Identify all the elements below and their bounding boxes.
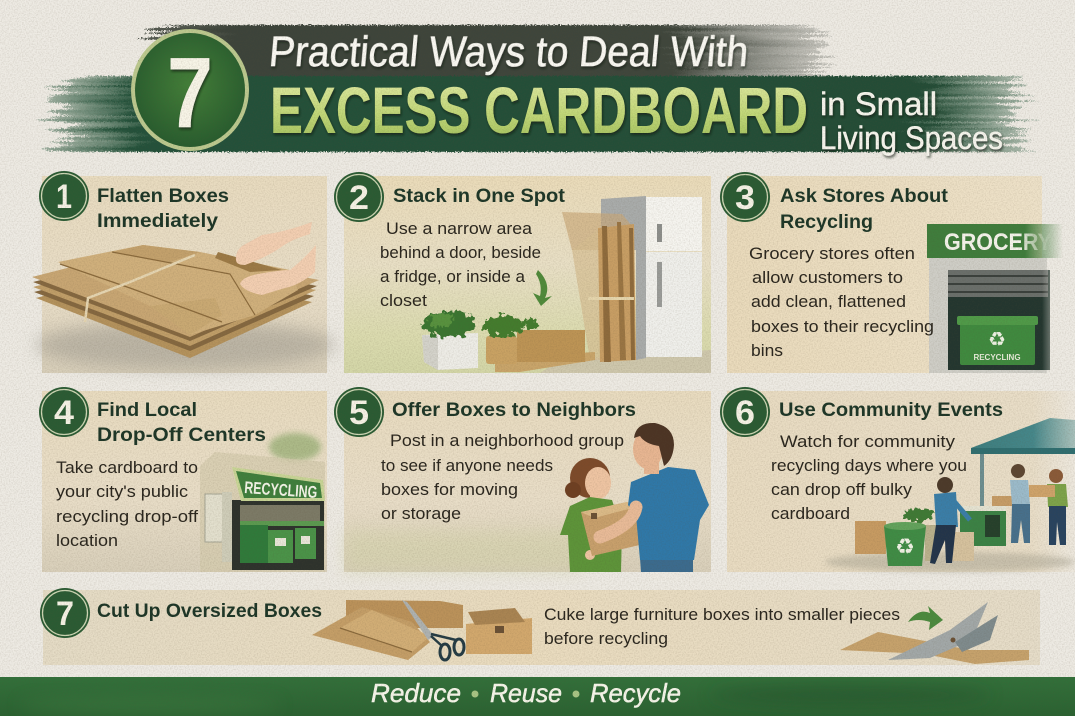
panel 3: ask stores (720, 172, 1066, 373)
illustration: recycling bucket (884, 522, 926, 566)
body 3: bins (751, 341, 783, 360)
body 5 (381, 431, 624, 523)
illustration: grocery store front: GROCERY (944, 229, 1052, 256)
brush stroke: lower green (65, 76, 1015, 152)
badge 4: 4 (54, 394, 74, 432)
heading 1: Flatten Boxes (97, 186, 229, 207)
icon: green arrow (533, 270, 552, 306)
body 2: Use a narrow area (386, 219, 533, 238)
body 4: location (56, 531, 118, 550)
title badge (131, 29, 249, 151)
body 7: Cuke large furniture boxes into smaller pieces (544, 605, 900, 624)
footer band: Recycle (590, 678, 681, 708)
body 2: a fridge, or inside a (380, 267, 526, 286)
footer band: Reuse (490, 678, 562, 708)
illustration: foliage (904, 508, 932, 522)
illustration: scissors (402, 600, 464, 660)
panel 4: drop-off centers (39, 387, 327, 572)
illustration: leaning cardboard (562, 212, 636, 362)
illustration: cut cardboard pieces (312, 600, 463, 660)
illustration: floor (540, 350, 711, 373)
badge 6: 6 (735, 394, 755, 432)
title line 2: EXCESS CARDBOARD (270, 73, 808, 147)
body 6: cardboard (771, 504, 850, 523)
badge 7: 7 (56, 595, 74, 633)
body 2: behind a door, beside (380, 243, 541, 262)
body 4: recycling drop-off (56, 507, 198, 526)
body 3 (749, 244, 934, 360)
illustration: drop-off building (200, 452, 325, 572)
body 5: or storage (381, 504, 461, 523)
illustration: tree (269, 433, 321, 461)
heading 3: Ask Stores About (780, 186, 949, 207)
badge 2: 2 (349, 179, 369, 217)
illustration: recycling bin: RECYCLING (973, 353, 1021, 362)
body 4: your city's public (56, 482, 189, 501)
heading 4 (97, 400, 266, 446)
body 4: Take cardboard to (56, 458, 198, 477)
floor shadow (35, 321, 335, 369)
title line 3: in Small (820, 86, 937, 122)
title line 4: Living Spaces (820, 120, 1003, 156)
body 3: add clean, flattened (751, 292, 906, 311)
panel 7: cut up oversized boxes (40, 588, 1040, 665)
heading 7: Cut Up Oversized Boxes (97, 601, 322, 622)
badge 6 (720, 387, 770, 437)
illustration: recycling sign: RECYCLING (244, 478, 318, 502)
heading 3 (780, 186, 949, 233)
body 3: Grocery stores often (749, 244, 915, 263)
badge 1 (39, 171, 89, 221)
panel 2: stack in one spot (334, 172, 711, 373)
body 5: to see if anyone needs (381, 456, 553, 475)
body 7 (544, 605, 900, 648)
footer band (0, 677, 1075, 716)
body 6: Watch for community (780, 432, 956, 451)
illustration: grocery store front (927, 224, 1066, 373)
heading 3: Recycling (780, 212, 873, 233)
illustration: cardboard box (581, 502, 640, 556)
body 3: allow customers to (752, 268, 903, 287)
badge 3 (720, 172, 770, 222)
illustration: recycling bin: ♻ (988, 327, 1006, 351)
badge 1: 1 (56, 178, 72, 216)
illustration: stack of flattened cardboard (32, 245, 319, 358)
illustration: man in blue shirt (600, 423, 709, 572)
panel 1: flatten boxes (32, 171, 335, 373)
heading 5: Offer Boxes to Neighbors (392, 400, 636, 421)
title line 1: Practical Ways to Deal With (267, 28, 750, 75)
body 2: closet (380, 291, 427, 310)
heading 1: Immediately (97, 211, 218, 232)
brush stroke: upper dark (160, 25, 820, 79)
body 5: Post in a neighborhood group (390, 431, 624, 450)
badge 4 (39, 387, 89, 437)
illustration: plants (422, 311, 538, 337)
body 7: before recycling (544, 629, 668, 648)
badge 3: 3 (735, 179, 755, 217)
heading 6: Use Community Events (779, 400, 1003, 421)
title banner (65, 25, 1015, 156)
illustration: tent (971, 418, 1075, 524)
badge 7 (40, 588, 90, 638)
illustration: woman holding box (560, 458, 622, 572)
illustration: closed box (466, 608, 532, 654)
illustration: recycling sign (232, 467, 325, 502)
heading 2: Stack in One Spot (393, 186, 566, 207)
illustration: recycling bin (957, 316, 1038, 365)
body 6 (771, 432, 967, 523)
heading 4: Drop-Off Centers (97, 425, 266, 446)
body 2 (380, 219, 541, 310)
twine (85, 255, 195, 322)
illustration: two people at table (1010, 464, 1068, 545)
panel 5: offer to neighbors (334, 387, 711, 572)
badge 5: 5 (349, 394, 369, 432)
heading 4: Find Local (97, 400, 197, 421)
illustration: shears on cardboard (840, 602, 1029, 664)
heading 1 (97, 186, 229, 232)
footer band: Reduce (371, 678, 461, 708)
illustration: collection table and boxes (855, 496, 1012, 561)
title badge: 7 (167, 37, 213, 149)
panel 6: community events (720, 387, 1075, 572)
body 4 (56, 458, 198, 550)
illustration: hands (236, 222, 316, 295)
illustration: fridge (601, 196, 702, 360)
illustration: recycling bucket: ♻ (895, 535, 915, 560)
illustration: plank and baskets (422, 330, 595, 372)
badge 2 (334, 172, 384, 222)
badge 5 (334, 387, 384, 437)
body 3: boxes to their recycling (751, 317, 934, 336)
illustration: dumpsters (240, 521, 324, 563)
icon: green arrow (908, 606, 943, 630)
body 6: can drop off bulky (771, 480, 913, 499)
body 5: boxes for moving (381, 480, 518, 499)
body 6: recycling days where you (771, 456, 967, 475)
illustration: volunteer in blue (930, 477, 970, 564)
